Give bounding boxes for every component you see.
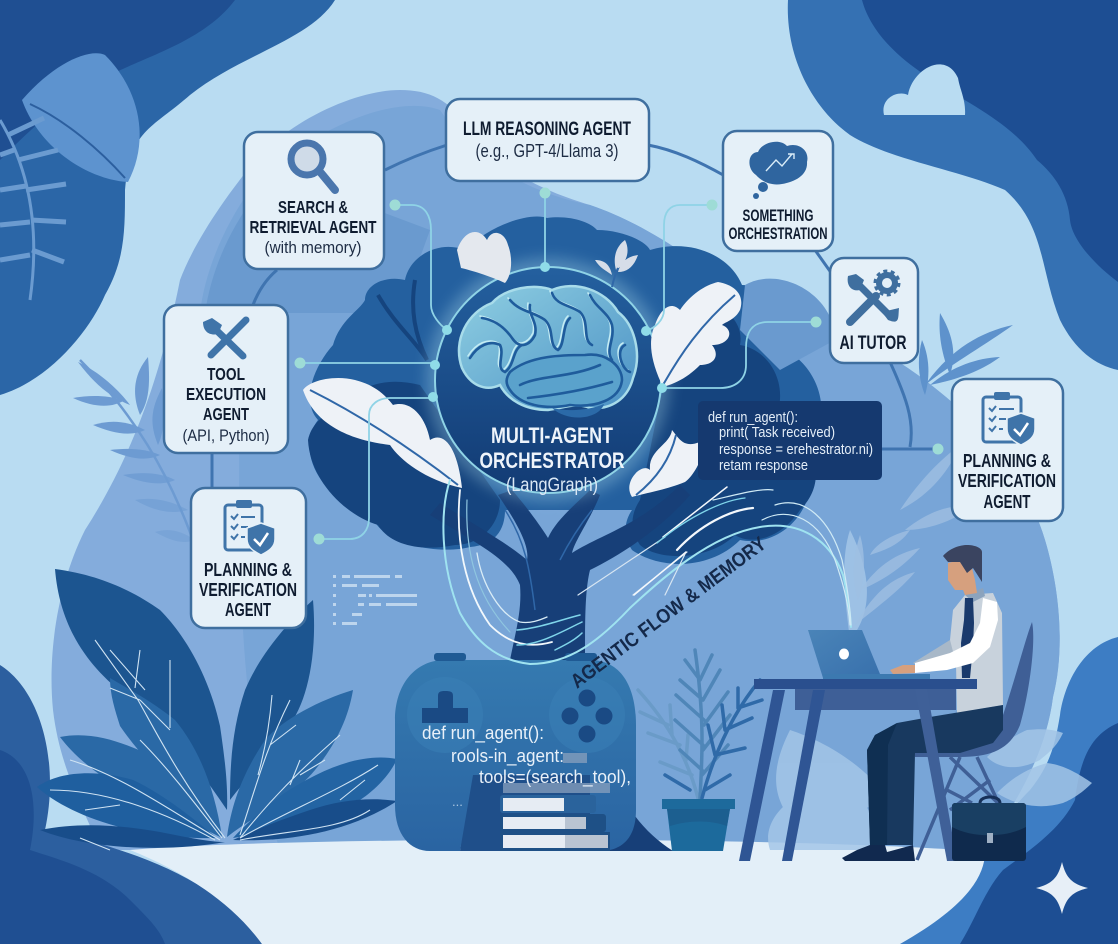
icon: clipboard and shield: [983, 392, 1035, 445]
code on controller: [422, 723, 631, 809]
code panel: def run_agent():: [708, 409, 798, 426]
code on controller: rools-in_agent:: [451, 746, 564, 767]
code on controller: def run_agent():: [422, 723, 544, 744]
orchestrator title: MULTI-AGENT: [491, 423, 613, 448]
card: LLM reasoning agent: [446, 99, 649, 181]
card: tool execution agent: EXECUTION: [186, 384, 266, 404]
card: something orchestration: [723, 131, 833, 251]
corner shapes: bottom left: [0, 665, 262, 944]
card: search and retrieval agent: [244, 132, 384, 269]
icon: wrench and gear: [848, 271, 899, 322]
corner shapes: top right: [788, 0, 1118, 370]
icon: magnifier: [291, 143, 335, 190]
card: planning and verification agent (right): AGENT: [984, 492, 1031, 512]
potted plant: [638, 650, 762, 851]
card: planning and verification agent (left): PLANNING &: [204, 560, 292, 580]
stacked books: [500, 753, 610, 851]
card: planning and verification agent (left): AGENT: [225, 600, 271, 620]
ground: [130, 840, 985, 944]
desk top and right leg: [754, 679, 977, 861]
tree trunk and branches: [430, 485, 690, 851]
background dome shape: [52, 90, 1060, 850]
orchestrator title: [480, 423, 625, 496]
chair: [915, 622, 1033, 860]
white leaves: [303, 232, 741, 497]
game controller: [395, 653, 636, 851]
connector lines: [212, 145, 938, 488]
code panel: retam response: [719, 457, 808, 474]
tree canopy: [308, 217, 835, 564]
code on controller: ...: [452, 794, 463, 809]
card: search and retrieval agent: RETRIEVAL AGENT: [250, 217, 377, 237]
card: tool execution agent: TOOL: [207, 364, 245, 384]
card: something orchestration: ORCHESTRATION: [728, 225, 828, 243]
icon: top left leaf and fern: [0, 53, 140, 300]
code panel: print( Task received): [719, 424, 835, 441]
icon: buttons: [562, 690, 612, 742]
corner shapes: top left: [0, 0, 335, 395]
icon: sparkle: [1036, 862, 1088, 914]
fern: right top: [919, 313, 1013, 395]
leaf veins: [310, 268, 735, 495]
card: planning and verification agent (left): [191, 488, 306, 628]
card: planning and verification agent (left): VERIFICATION: [199, 580, 297, 600]
card: planning and verification agent (right): VERIFICATION: [958, 471, 1056, 491]
agentic flow and memory label: AGENTIC FLOW & MEMORY: [567, 532, 771, 693]
card: AI tutor: AI TUTOR: [840, 333, 907, 354]
card: AI tutor: [830, 258, 918, 363]
plant: big foreground leaves: [37, 569, 397, 850]
plant: left background fronds: [73, 357, 200, 560]
person: [842, 545, 1003, 861]
card: planning and verification agent (right): [952, 379, 1063, 521]
card: LLM reasoning agent: (e.g., GPT-4/Llama 3): [476, 141, 618, 161]
code on controller: tools=(search_tool),: [479, 767, 631, 788]
orchestrator title: ORCHESTRATOR: [480, 448, 625, 473]
briefcase: [952, 797, 1026, 861]
card: tool execution agent: [164, 305, 288, 453]
code dashes: [333, 575, 417, 625]
icon: d-pad: [422, 691, 468, 723]
card: LLM reasoning agent: LLM REASONING AGENT: [463, 119, 631, 140]
orchestrator title: (LangGraph): [506, 475, 598, 496]
glowing orb: [426, 258, 670, 502]
plant: right background fronds: [768, 313, 1092, 850]
icon: tools: [203, 318, 246, 356]
card: search and retrieval agent: SEARCH &: [278, 197, 348, 217]
icon: cloud: [883, 64, 965, 115]
corner shapes: bottom right: [880, 637, 1118, 944]
card: tool execution agent: AGENT: [203, 404, 249, 424]
laptop: [808, 630, 930, 679]
desk: [739, 689, 956, 861]
icon: thought cloud: [749, 142, 807, 199]
card: search and retrieval agent: (with memory): [264, 238, 362, 257]
circuit lines and nodes: [294, 188, 944, 544]
code panel: [698, 401, 882, 480]
card: planning and verification agent (right): PLANNING &: [963, 451, 1051, 471]
card: something orchestration: SOMETHING: [742, 207, 814, 225]
icon: clipboard and shield: [225, 500, 275, 555]
code panel: response = erehestrator.ni): [719, 441, 873, 458]
agentic flow lines: [443, 480, 851, 664]
icon: brain: [459, 286, 637, 418]
card: tool execution agent: (API, Python): [182, 426, 270, 445]
